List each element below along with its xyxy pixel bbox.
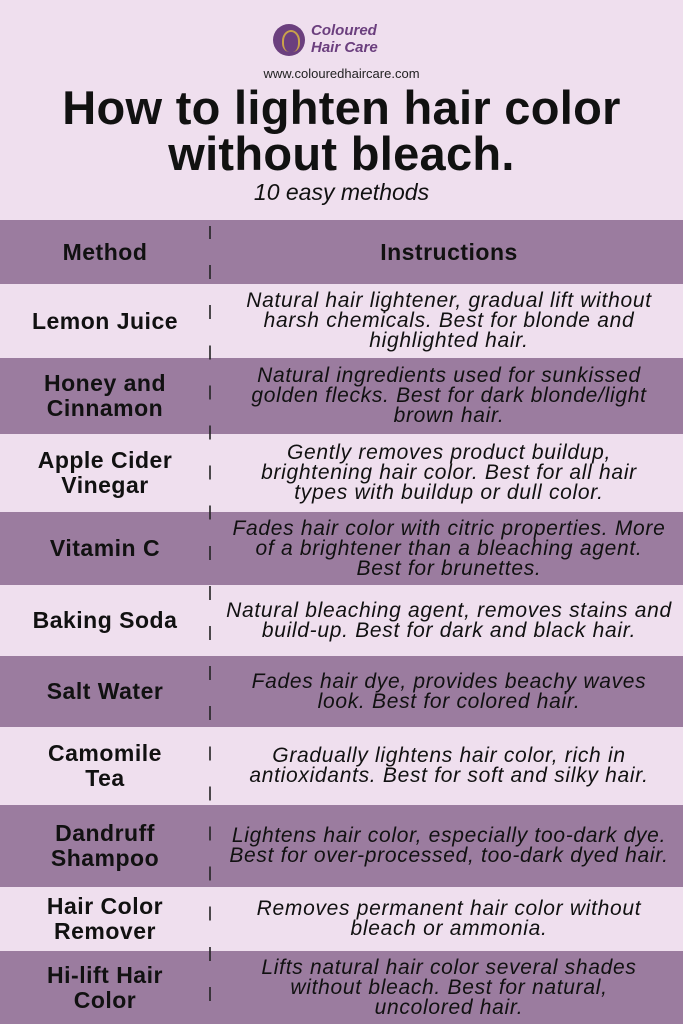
logo text: Coloured <box>311 22 377 39</box>
row: vitamin c: of a brightener than a bleaching agent. <box>256 536 642 560</box>
row: honey: golden flecks. Best for dark blonde/light <box>251 384 647 407</box>
logo text: Hair Care <box>311 39 378 56</box>
row: dandruff: Shampoo <box>51 845 159 871</box>
logo text <box>311 22 378 56</box>
row: honey <box>0 358 683 434</box>
row: acv: brightening hair color. Best for all hair <box>261 461 637 484</box>
row: salt water <box>0 656 683 727</box>
row: lemon juice: Natural hair lightener, gradual lift without <box>246 289 652 312</box>
row: baking soda: Natural bleaching agent, removes stains and <box>226 598 672 622</box>
row: remover <box>47 893 642 944</box>
row: salt water: Salt Water <box>47 678 163 704</box>
row: baking soda: build-up. Best for dark and black hair. <box>262 618 636 642</box>
row: acv: Apple Cider <box>38 447 172 473</box>
title: How to lighten hair color <box>62 81 621 134</box>
row: baking soda <box>33 598 672 642</box>
row: camomile: antioxidants. Best for soft and silky hair. <box>249 764 649 787</box>
logo <box>273 22 378 56</box>
subtitle: 10 easy methods <box>254 179 429 205</box>
title <box>62 81 621 180</box>
row: camomile: Camomile <box>48 740 162 766</box>
row: dandruff: Dandruff <box>55 820 155 846</box>
header row: Instructions <box>380 239 518 265</box>
icon: logo circle <box>273 24 305 56</box>
row: honey: Natural ingredients used for sunkissed <box>257 364 641 387</box>
row: hi-lift: Hi-lift Hair <box>47 962 163 988</box>
row: vitamin c: Vitamin C <box>50 535 160 561</box>
row: vitamin c: Fades hair color with citric properties. More <box>232 516 665 540</box>
row: honey: Cinnamon <box>47 395 163 421</box>
row: camomile <box>48 740 649 791</box>
row: hi-lift: Color <box>74 986 136 1012</box>
row: camomile: Gradually lightens hair color, rich in <box>272 744 626 767</box>
row: vitamin c <box>0 512 683 585</box>
row: hi-lift: without bleach. Best for natural, <box>290 976 608 998</box>
header row <box>0 220 683 284</box>
title: without bleach. <box>168 127 515 180</box>
row: hi-lift: Lifts natural hair color several shades <box>261 956 637 978</box>
row: baking soda: Baking Soda <box>33 607 177 633</box>
row: honey: Honey and <box>44 370 166 396</box>
row: lemon juice: Lemon Juice <box>32 308 178 334</box>
row: dandruff: Lightens hair color, especially too-dark dye. <box>232 824 666 847</box>
row: dandruff: Best for over-processed, too-dark dyed hair. <box>229 844 669 867</box>
row: lemon juice <box>32 289 652 352</box>
row: hi-lift <box>0 951 683 1024</box>
row: remover: Removes permanent hair color without <box>257 897 641 920</box>
row: salt water: look. Best for colored hair. <box>318 690 580 712</box>
row: acv: Gently removes product buildup, <box>287 441 611 464</box>
row: lemon juice: harsh chemicals. Best for blonde and <box>264 309 634 332</box>
row: camomile: Tea <box>85 765 125 791</box>
row: acv: types with buildup or dull color. <box>294 481 604 504</box>
table <box>0 220 683 1024</box>
row: lemon juice: highlighted hair. <box>369 329 529 352</box>
row: remover: Remover <box>54 918 156 944</box>
row: acv <box>38 441 637 504</box>
row: remover: bleach or ammonia. <box>350 917 548 940</box>
row: remover: Hair Color <box>47 893 163 919</box>
row: vitamin c: Best for brunettes. <box>357 556 541 580</box>
website: www.colouredhaircare.com <box>263 66 420 81</box>
row: acv: Vinegar <box>61 472 149 498</box>
row: salt water: Fades hair dye, provides beachy waves <box>252 670 646 692</box>
row: dandruff <box>0 805 683 887</box>
row: honey: brown hair. <box>394 404 504 427</box>
row: hi-lift: uncolored hair. <box>375 996 523 1018</box>
header row: Method <box>63 238 147 264</box>
